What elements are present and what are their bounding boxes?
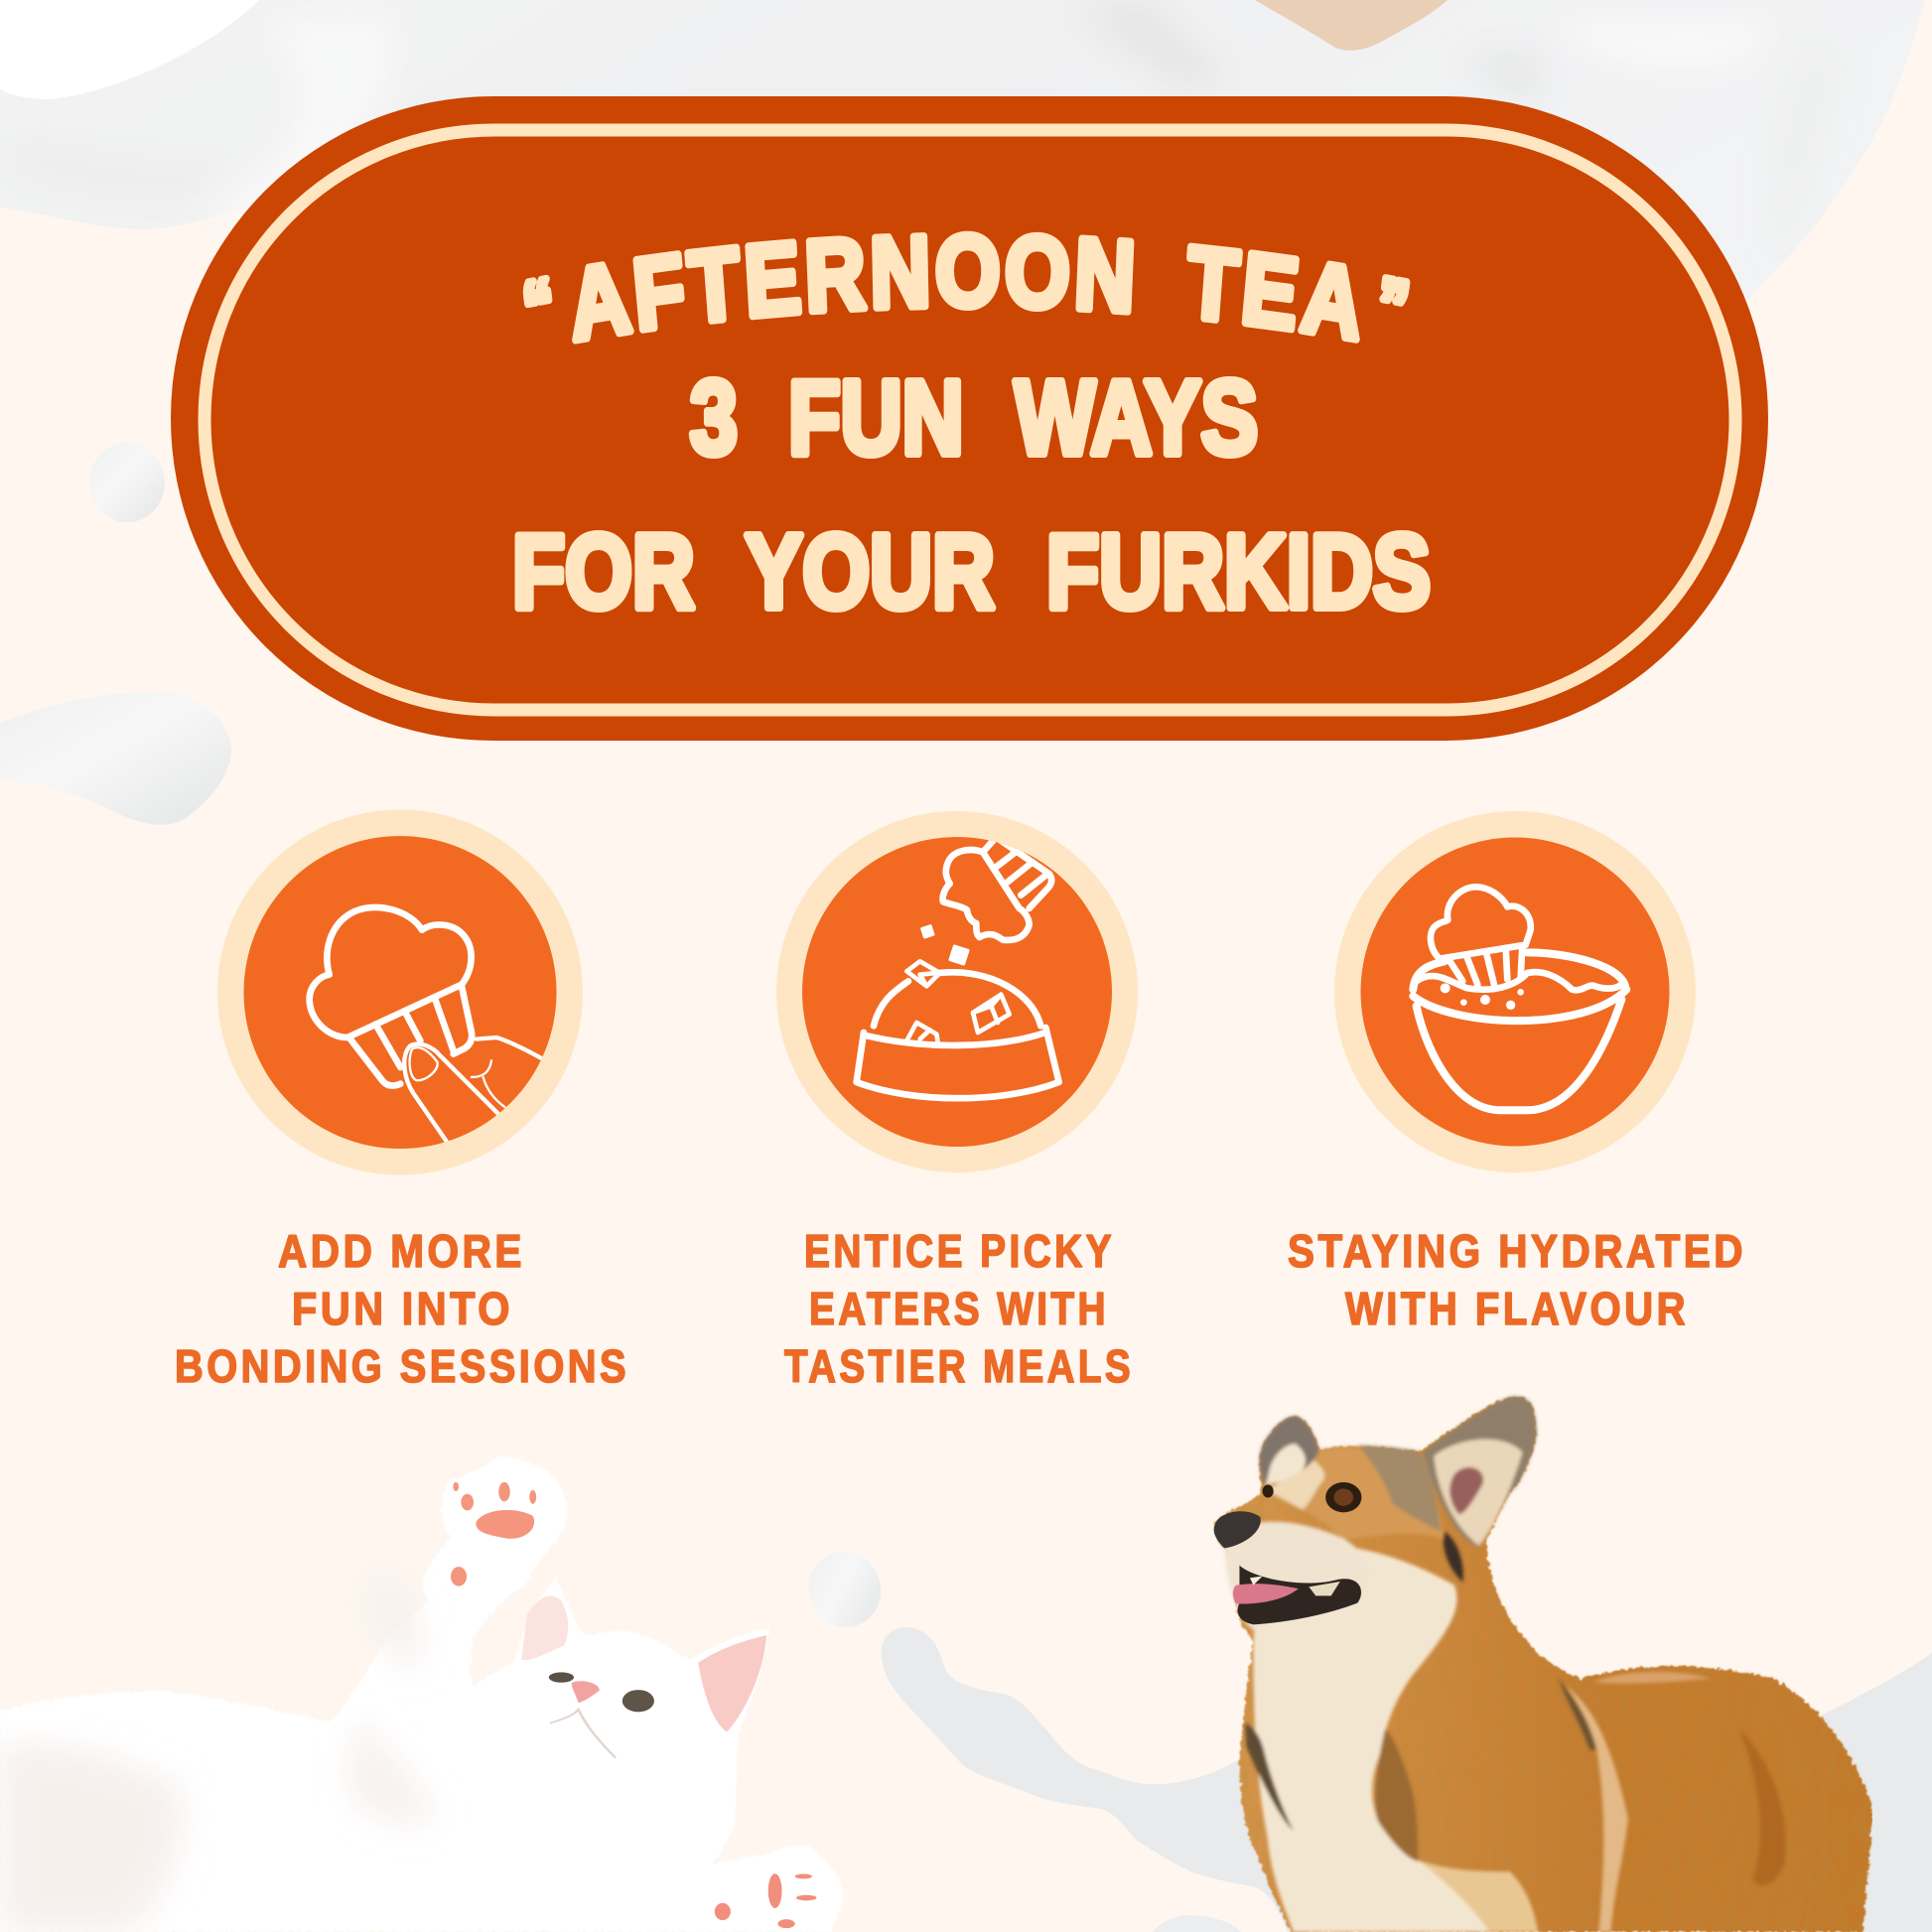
cat lower paw pads	[715, 1873, 817, 1928]
icon circle 3	[1334, 811, 1696, 1173]
dog chest	[1245, 1544, 1786, 1932]
caption 2	[784, 1225, 1134, 1392]
icon circle 1	[217, 810, 583, 1175]
milk drop left	[89, 443, 165, 522]
title text: “	[522, 274, 552, 308]
panel: entice picky eaters	[776, 811, 1138, 1392]
icon circle 2	[776, 811, 1138, 1173]
caption 3	[1288, 1225, 1746, 1334]
cat	[0, 1455, 844, 1932]
milk splash bottom	[882, 1627, 1932, 1932]
panel: add more fun	[175, 810, 629, 1392]
cat face	[549, 1672, 654, 1758]
caption 1: FUN INTO	[292, 1283, 513, 1334]
title pill	[171, 96, 1768, 741]
caption 2: ENTICE PICKY	[804, 1225, 1115, 1277]
dog nose	[1214, 1511, 1261, 1548]
corgi dog	[1214, 1397, 1872, 1932]
icon: muffin dipped in bowl	[1413, 887, 1626, 1110]
title text: 3 FUN WAYS	[690, 359, 1258, 477]
title text	[512, 230, 1431, 630]
caption 2: EATERS WITH	[809, 1283, 1109, 1334]
title text: ”	[1379, 274, 1410, 307]
title text: AFTERNOON TEA	[572, 230, 1360, 344]
title text: FOR YOUR FURKIDS	[512, 513, 1431, 630]
dog right ear	[1424, 1397, 1537, 1548]
caption 1: BONDING SESSIONS	[175, 1340, 629, 1392]
caption 3: STAYING HYDRATED	[1288, 1225, 1746, 1277]
dog mouth	[1233, 1566, 1361, 1624]
icon: muffin in hand	[310, 907, 543, 1142]
title pill inner ring	[205, 130, 1735, 710]
caption 1: ADD MORE	[278, 1225, 525, 1277]
panel: staying hydrated	[1288, 811, 1746, 1334]
dog eyes	[1262, 1482, 1361, 1512]
top milk splash	[0, 0, 1924, 298]
caption 2: TASTIER MEALS	[784, 1340, 1134, 1392]
dog head fur	[1224, 1446, 1463, 1630]
caption 1	[175, 1225, 629, 1392]
dog left ear	[1260, 1416, 1319, 1485]
caption 3: WITH FLAVOUR	[1345, 1283, 1689, 1334]
milk blob left	[0, 692, 231, 825]
beige cone tip at top	[1255, 0, 1448, 51]
icon: muffin crumbling into bowl	[857, 837, 1059, 1098]
cat raised paw pads	[451, 1482, 536, 1587]
cat ears	[521, 1595, 766, 1732]
milk drop centre	[800, 1544, 890, 1635]
